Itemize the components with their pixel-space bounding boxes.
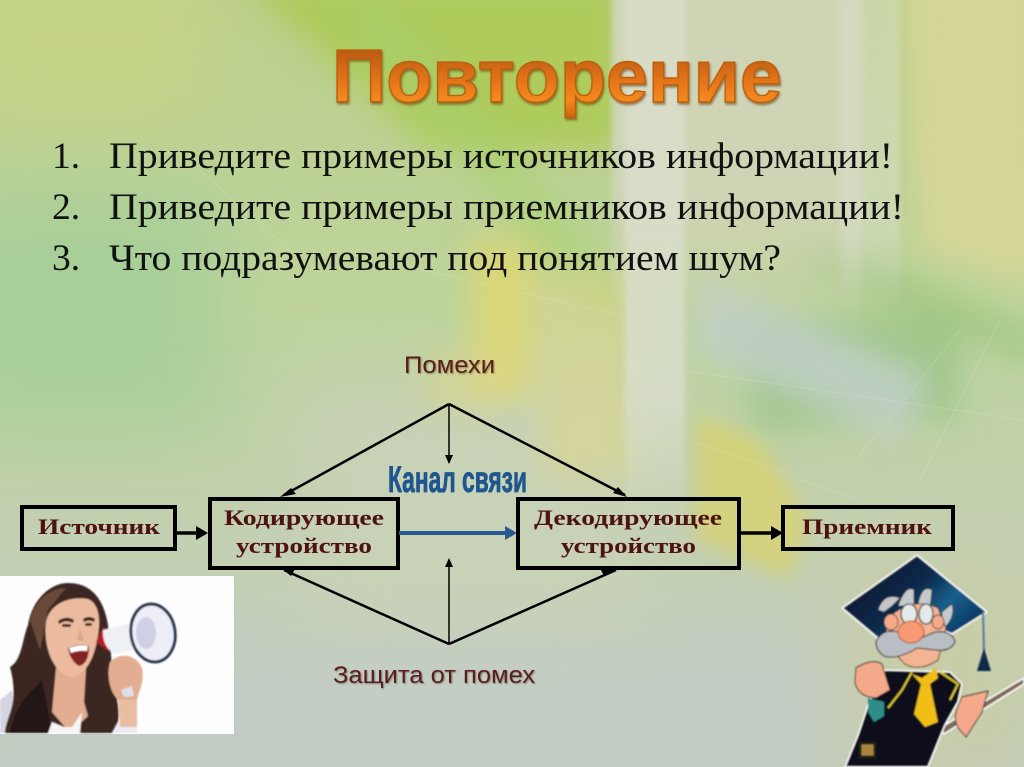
neck and chest [52, 668, 88, 733]
box: encoder: устройство [236, 533, 372, 558]
nose [898, 621, 924, 643]
question 3: Что подразумевают под понятием шум? [109, 238, 781, 279]
eyes and brows [58, 618, 74, 624]
megaphone [96, 626, 110, 652]
belt buckle [860, 743, 875, 757]
arrow: channel [399, 526, 517, 540]
arrow: source to encoder [175, 526, 208, 540]
question 1: 1. [52, 136, 80, 177]
tassel [983, 612, 984, 652]
question 2: 2. [52, 187, 80, 228]
question 3: 3. [52, 238, 80, 279]
sleeve [0, 690, 20, 733]
face [46, 598, 99, 677]
shirt [48, 712, 82, 733]
pointer stick [940, 678, 1024, 734]
noise arrows [280, 404, 627, 497]
title: Повторение [332, 34, 782, 118]
collar trim [888, 672, 912, 708]
nose shade [77, 628, 84, 641]
hand [109, 656, 143, 700]
ears [884, 614, 898, 630]
question 1: Приведите примеры источников информации! [109, 136, 893, 177]
box: receiver [783, 507, 953, 549]
box: source: Источник [38, 514, 160, 539]
yellow patch [696, 415, 810, 580]
cuff [868, 698, 884, 722]
arrow: decoder to receiver [741, 526, 783, 540]
box: encoder [210, 499, 398, 568]
image: woman with megaphone [0, 576, 234, 734]
box: source [22, 507, 175, 549]
question list [52, 136, 904, 279]
label: noise: Помехи [404, 352, 495, 379]
hair [5, 583, 119, 733]
box: decoder: устройство [561, 533, 696, 558]
question 2: Приведите примеры приемников информации! [109, 187, 904, 228]
tie [912, 668, 938, 727]
left fist [855, 662, 890, 698]
protection arrows [281, 558, 618, 644]
label: channel: Канал связи [388, 459, 527, 500]
hair [878, 596, 900, 612]
moustache [876, 631, 955, 657]
box: decoder [518, 499, 739, 568]
forearm [118, 695, 137, 727]
label: protection: Защита от помех [333, 662, 535, 689]
box: decoder: Декодирующее [534, 505, 722, 530]
decorative light lines [200, 170, 1024, 500]
glasses [901, 604, 917, 624]
image: professor cartoon [842, 555, 1024, 767]
robe [845, 670, 962, 767]
head [886, 604, 946, 667]
mouth [68, 645, 89, 666]
right hand [955, 691, 988, 737]
box: encoder: Кодирующее [224, 505, 384, 530]
mortarboard [842, 555, 987, 640]
box: receiver: Приемник [802, 514, 932, 539]
